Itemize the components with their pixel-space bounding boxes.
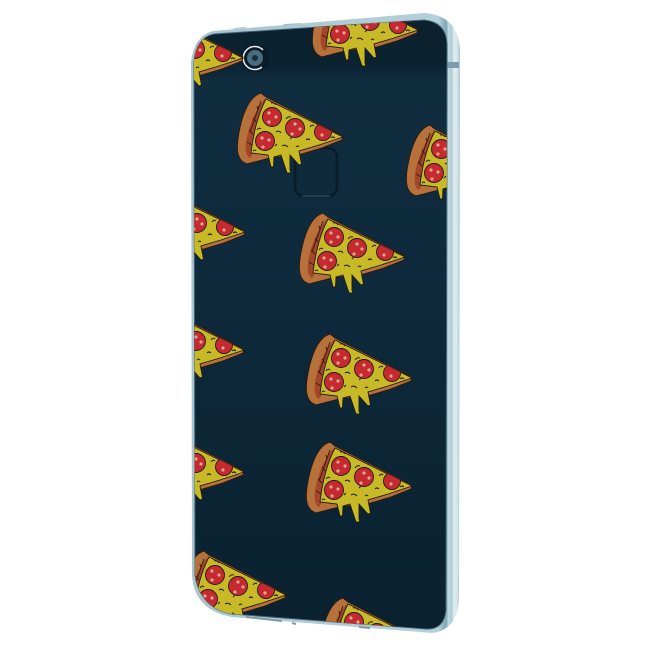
right side rim band xyxy=(447,62,459,68)
pizza slice: bottom left xyxy=(194,550,287,615)
pizza slice: left row two xyxy=(194,204,246,260)
pizza slice: top centre xyxy=(312,21,419,66)
phone case outer rim xyxy=(191,13,460,633)
pizza slice: left row four xyxy=(194,446,245,500)
pizza slice: upper centre xyxy=(237,93,343,173)
pizza slice: centre row five xyxy=(306,442,412,522)
pizza slice: left row three xyxy=(194,324,245,378)
phone case product illustration xyxy=(191,13,460,633)
bottom edge details xyxy=(246,616,370,629)
pizza slice: upper right xyxy=(406,124,447,200)
pizza slice: bottom centre xyxy=(324,598,398,627)
pizza slices pattern xyxy=(194,21,447,627)
camera xyxy=(241,44,269,72)
pizza slice: top left xyxy=(194,38,244,86)
fingerprint sensor xyxy=(295,148,337,196)
top edge buttons xyxy=(234,23,301,29)
phone dark back panel xyxy=(194,20,447,629)
pizza slice: middle xyxy=(299,213,405,293)
pizza slice: centre row four xyxy=(306,334,412,414)
